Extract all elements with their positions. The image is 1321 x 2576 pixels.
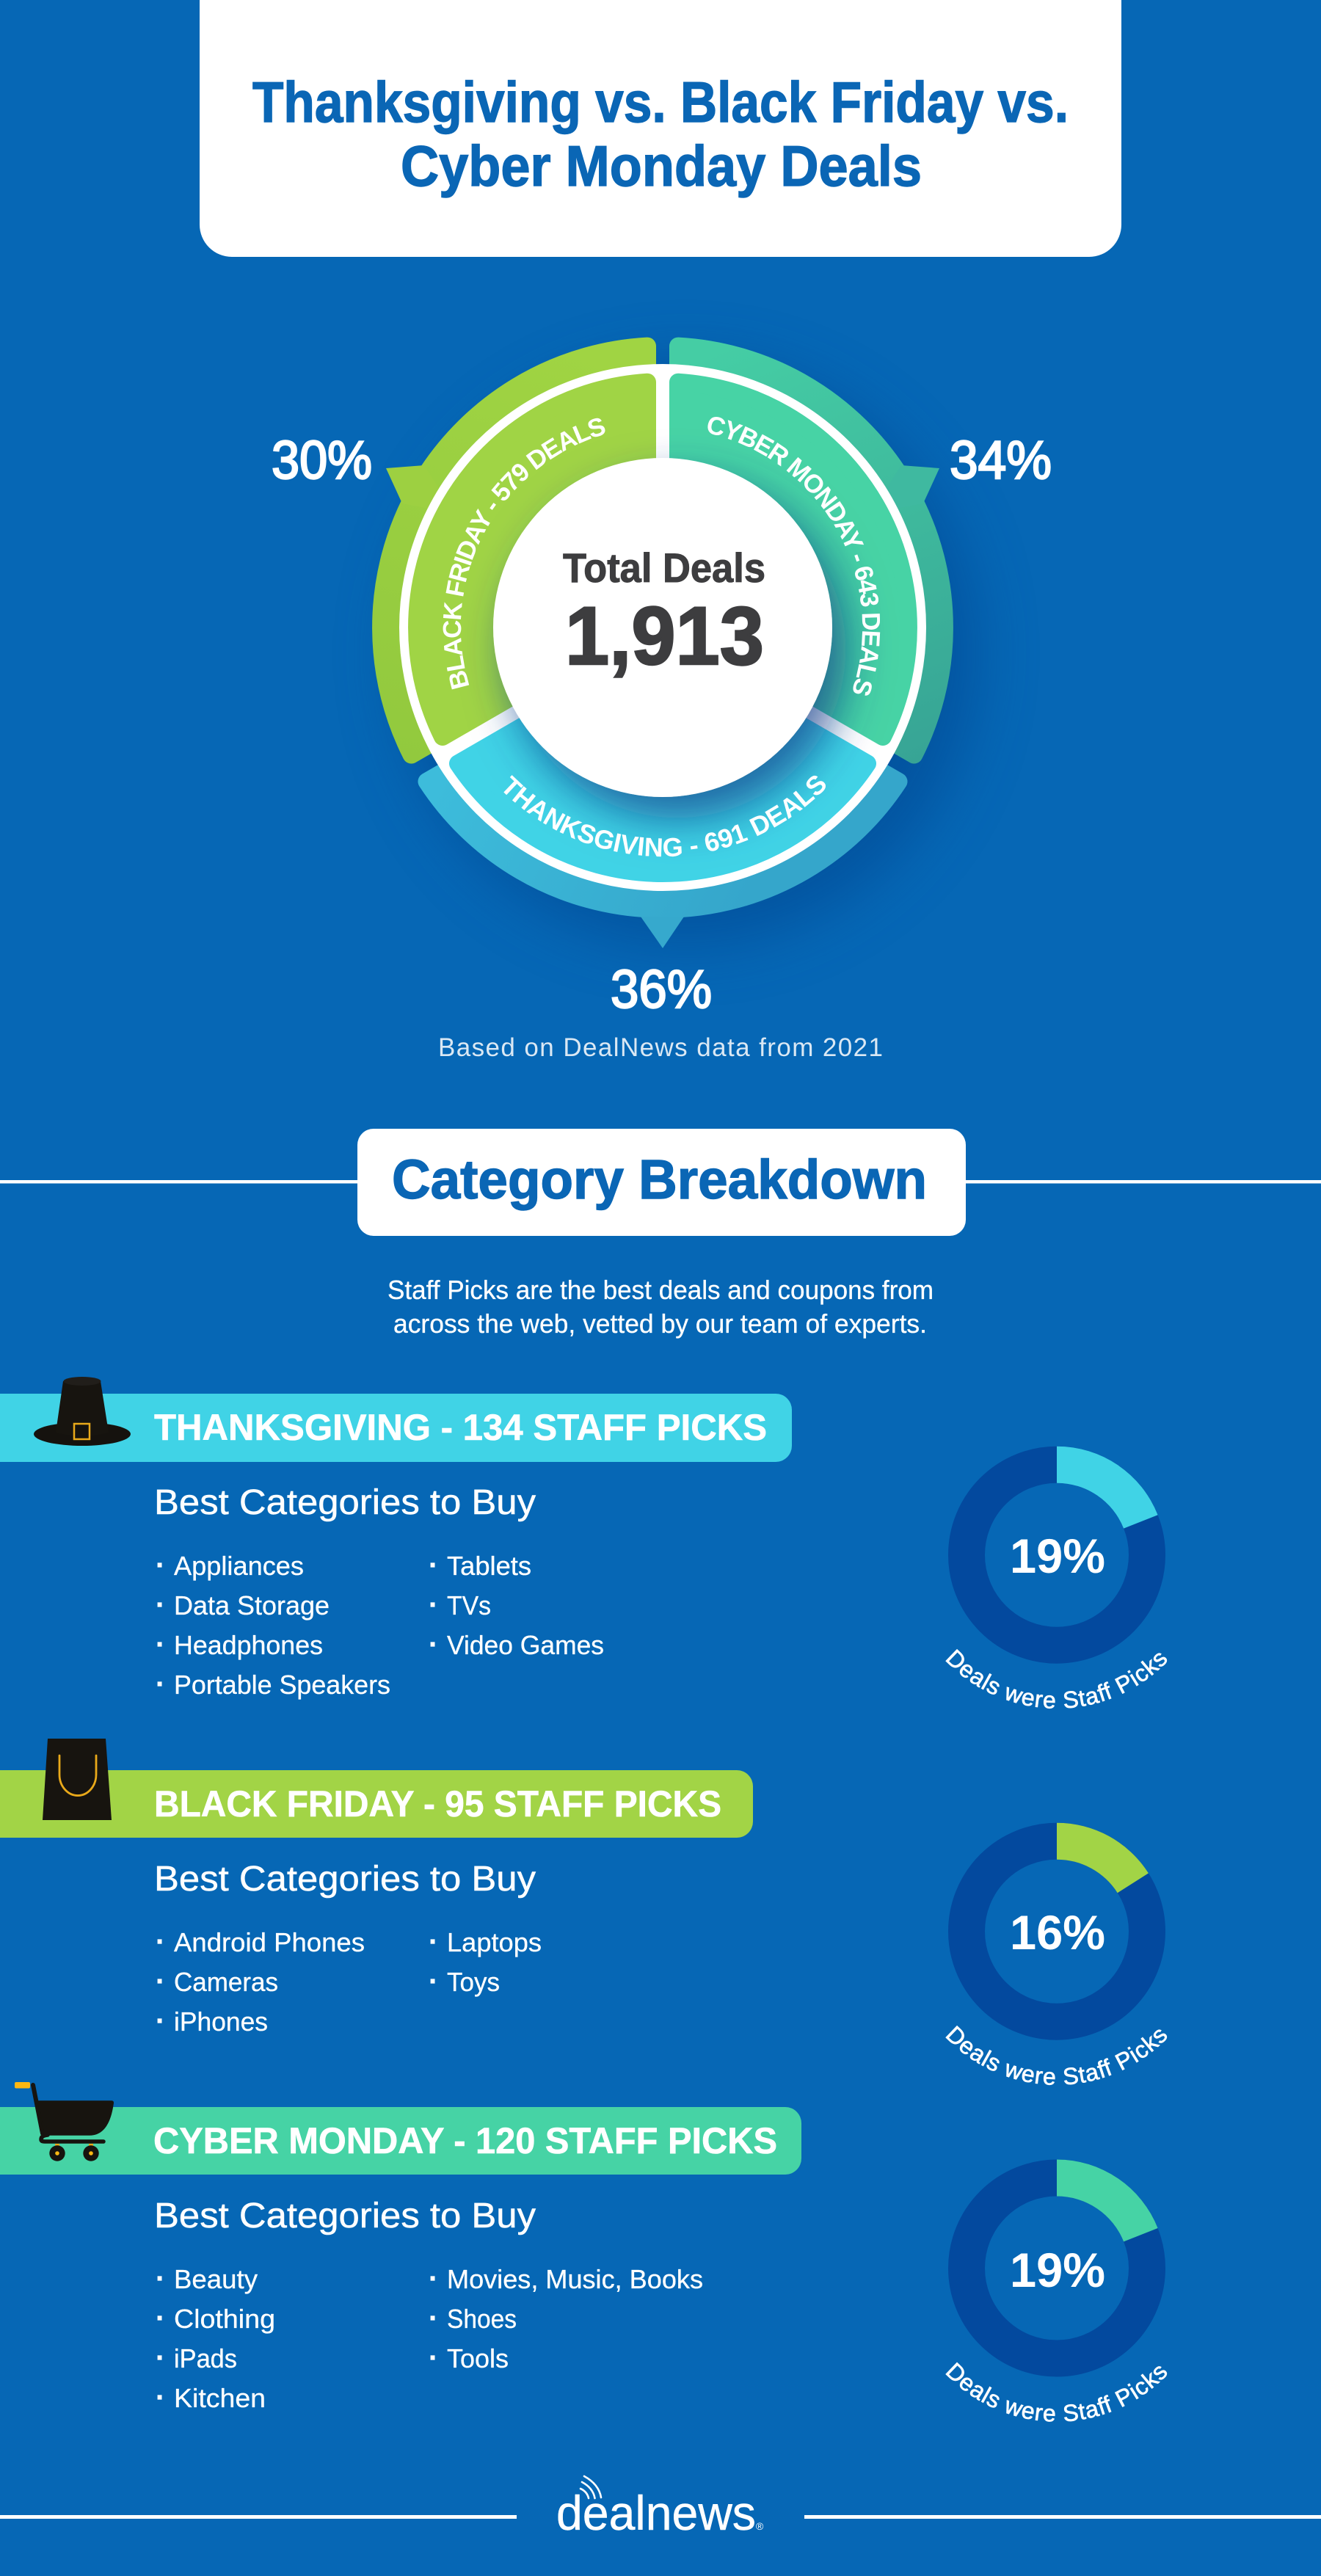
category list: Appliances (174, 1551, 304, 1581)
category list: Video Games (447, 1630, 604, 1660)
category list: iPhones (174, 2006, 268, 2037)
category list: TVs (447, 1590, 491, 1620)
panel: thanksgiving (0, 1377, 1167, 1709)
title card (200, 0, 1121, 257)
segment: cyber monday (678, 382, 909, 737)
header text: THANKSGIVING - 134 STAFF PICKS (154, 1407, 767, 1448)
category list: Headphones (174, 1630, 323, 1660)
ring chart: 19% (945, 1446, 1167, 1709)
header text: BLACK FRIDAY - 95 STAFF PICKS (154, 1783, 721, 1824)
category list: Tablets (447, 1551, 531, 1581)
category list: iPads (174, 2343, 237, 2373)
category list (156, 1549, 604, 1700)
icon: pilgrim hat (34, 1377, 131, 1446)
source note: Based on DealNews data from 2021 (438, 1033, 883, 1062)
donut shadow (396, 363, 976, 943)
pointer: cyber monday (870, 465, 939, 514)
section heading: category breakdown: Category Breakdown (392, 1149, 927, 1210)
title: Thanksgiving vs. Black Friday vs. (252, 70, 1069, 134)
category list: · (429, 2263, 438, 2295)
category list: · (156, 1549, 165, 1582)
header bar: thanksgiving (0, 1394, 792, 1462)
white ring (399, 364, 926, 891)
ring chart: 16% (945, 1823, 1167, 2086)
ring chart: 16%: 16% (1010, 1905, 1105, 1960)
percent: black friday: 30% (272, 431, 372, 490)
ring chart: 16%: Deals were Staff Picks (945, 2026, 1167, 2086)
pointer: black friday (386, 465, 455, 514)
title: Cyber Monday Deals (401, 134, 922, 198)
category list: · (156, 2005, 165, 2037)
category list: Beauty (174, 2264, 258, 2294)
category list: · (156, 1629, 165, 1661)
category list: Android Phones (174, 1927, 365, 1957)
category list: · (156, 1668, 165, 1700)
segment: thanksgiving (458, 714, 867, 873)
segment: black friday (417, 382, 647, 737)
category list: · (429, 2342, 438, 2374)
icon: shopping bag (43, 1739, 112, 1820)
header bar: cyber monday (0, 2107, 801, 2175)
category list: · (156, 2342, 165, 2374)
ring chart: 19%: Deals were Staff Picks (945, 2362, 1167, 2422)
total deals value: 1,913 (565, 590, 764, 682)
category list (156, 1926, 542, 2037)
logo: dealnews: ® (756, 2520, 764, 2532)
category list: · (429, 1629, 438, 1661)
category list: Movies, Music, Books (447, 2264, 703, 2294)
category list: Toys (447, 1967, 500, 1997)
panel: black friday (0, 1739, 1167, 2086)
segment label: cyber monday: CYBER MONDAY - 643 DEALS (707, 417, 881, 696)
percent: cyber monday: 34% (950, 431, 1052, 490)
pointer: thanksgiving (641, 917, 684, 948)
outer arc: thanksgiving (427, 714, 898, 909)
segment label: black friday: BLACK FRIDAY - 579 DEALS (443, 418, 605, 690)
category list: Shoes (447, 2304, 517, 2334)
category list: · (156, 2302, 165, 2335)
subheading: Best Categories to Buy (154, 1860, 536, 1899)
category list (156, 2263, 703, 2414)
intro text: across the web, vetted by our team of experts. (393, 1309, 927, 1339)
category list: Tools (447, 2343, 509, 2373)
category list: · (156, 2263, 165, 2295)
ring chart: 19% (945, 2159, 1167, 2422)
category list: Cameras (174, 1967, 278, 1997)
subheading: Best Categories to Buy (154, 1483, 536, 1522)
header bar: black friday (0, 1770, 753, 1838)
category list: Clothing (174, 2304, 275, 2334)
section heading: category breakdown (357, 1129, 966, 1236)
category list: · (429, 1926, 438, 1958)
centre circle (493, 458, 832, 797)
category list: Data Storage (174, 1590, 330, 1620)
category list: Portable Speakers (174, 1670, 390, 1700)
category list: · (429, 2302, 438, 2335)
category list: · (429, 1589, 438, 1621)
category list: · (429, 1549, 438, 1582)
category list: · (156, 2382, 165, 2414)
ring chart: 19%: 19% (1010, 1529, 1105, 1583)
total deals label: Total Deals (563, 545, 765, 591)
intro text: Staff Picks are the best deals and coupons from (387, 1275, 934, 1305)
outer arc: cyber monday (678, 346, 945, 755)
logo: dealnews: dealnews (556, 2486, 756, 2540)
category list: · (156, 1965, 165, 1998)
category list: · (429, 1965, 438, 1998)
intro text (387, 1275, 934, 1339)
title (252, 70, 1069, 198)
donut chart: total deals (372, 338, 984, 951)
subheading: Best Categories to Buy (154, 2197, 536, 2235)
category list: Laptops (447, 1927, 542, 1957)
percent: thanksgiving: 36% (611, 960, 712, 1019)
icon: shopping cart (15, 2082, 113, 2161)
ring chart: 19%: 19% (1010, 2243, 1105, 2297)
category list: · (156, 1589, 165, 1621)
header text: CYBER MONDAY - 120 STAFF PICKS (153, 2120, 777, 2161)
segment label: thanksgiving: THANKSGIVING - 691 DEALS (503, 775, 826, 857)
category list: · (156, 1926, 165, 1958)
outer arc: black friday (381, 346, 647, 755)
panel: cyber monday (0, 2082, 1167, 2422)
category list: Kitchen (174, 2383, 266, 2413)
ring chart: 19%: Deals were Staff Picks (945, 1648, 1167, 1709)
